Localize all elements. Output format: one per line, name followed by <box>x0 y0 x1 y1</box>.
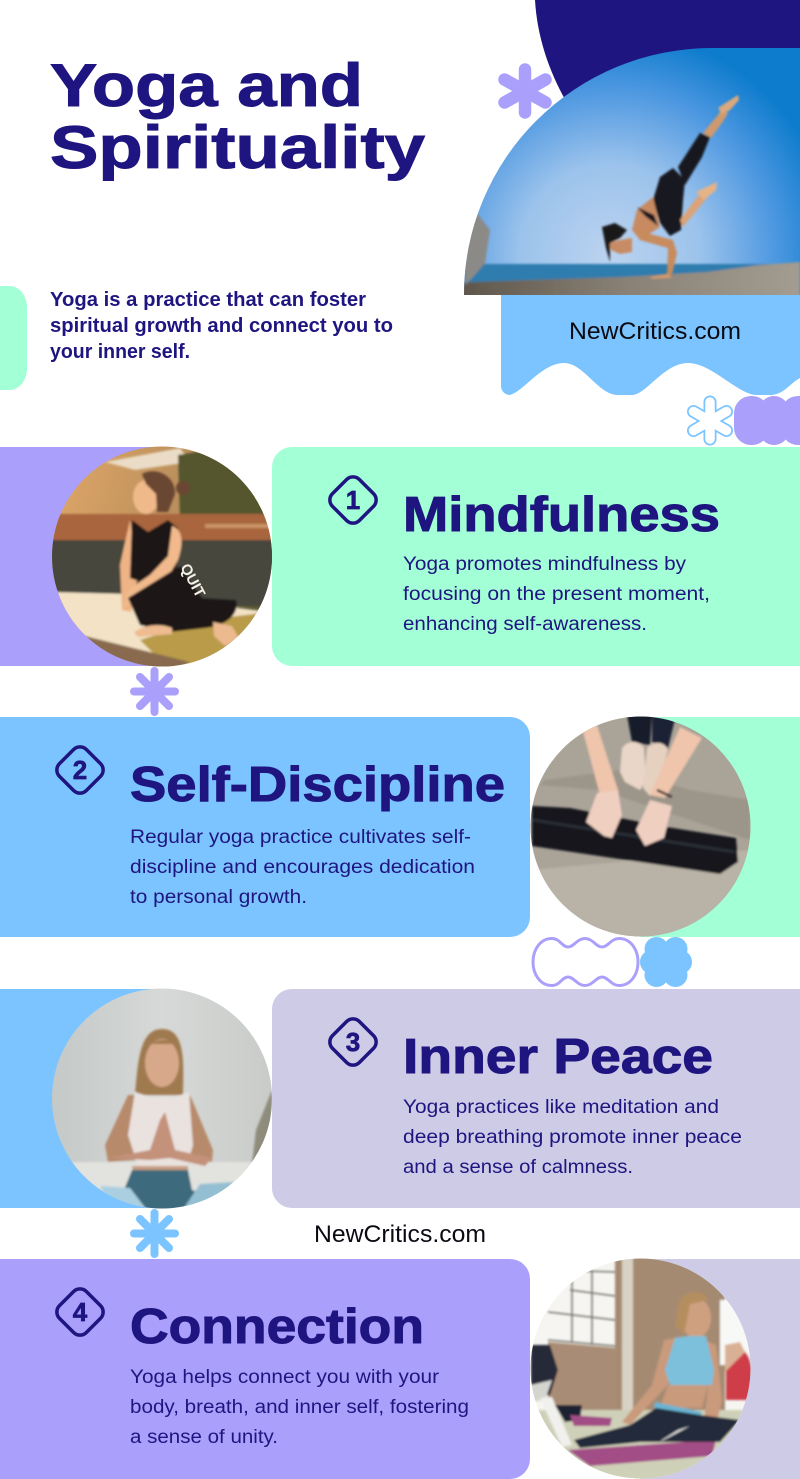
website label: NewCritics.com <box>569 318 741 345</box>
heading: Inner Peace <box>403 1030 713 1084</box>
body text <box>130 1367 469 1448</box>
body text <box>403 1097 742 1178</box>
panel backdrop: lavender <box>640 1259 800 1479</box>
body text: Yoga promotes mindfulness by <box>403 554 687 575</box>
intro text: spiritual growth and connect you to <box>50 315 393 337</box>
purple scalloped blob <box>734 396 800 445</box>
icon: numbered diamond 1 <box>326 473 380 527</box>
heading: Connection <box>130 1300 424 1354</box>
body text: enhancing self-awareness. <box>403 614 647 635</box>
content card: purple <box>0 1259 530 1479</box>
body text: deep breathing promote inner peace <box>403 1127 742 1148</box>
body text: and a sense of calmness. <box>403 1157 633 1178</box>
icon: blue eight-arm asterisk <box>134 1213 175 1254</box>
title: Yoga and <box>50 52 363 119</box>
content card: lavender <box>272 989 800 1208</box>
website label: NewCritics.com <box>314 1221 486 1248</box>
panel: connection <box>0 1257 800 1479</box>
body text: a sense of unity. <box>130 1427 278 1448</box>
panel backdrop: purple <box>0 447 170 666</box>
panel: self-discipline <box>0 715 800 940</box>
hero photo: yoga pose on seaside rock <box>460 45 800 297</box>
body text <box>130 827 475 908</box>
title <box>50 52 426 181</box>
intro accent tab <box>0 286 27 390</box>
body text: focusing on the present moment, <box>403 584 710 605</box>
icon: numbered diamond 2 <box>53 743 107 797</box>
outlined scalloped blob <box>533 938 638 986</box>
icon: numbered diamond 3: 3 <box>346 1027 360 1057</box>
title: Spirituality <box>50 114 426 181</box>
body text: body, breath, and inner self, fostering <box>130 1397 469 1418</box>
icon: purple eight-arm asterisk <box>134 671 175 712</box>
body text: to personal growth. <box>130 887 307 908</box>
icon: blue flower <box>640 937 692 987</box>
panel backdrop: blue <box>0 989 170 1208</box>
body text: Regular yoga practice cultivates self- <box>130 827 471 848</box>
icon: numbered diamond 4: 4 <box>73 1297 88 1327</box>
intro text: your inner self. <box>50 341 190 363</box>
content card: blue <box>0 717 530 937</box>
intro text: Yoga is a practice that can foster <box>50 289 366 311</box>
icon: purple six-arm asterisk <box>504 70 546 112</box>
body text: discipline and encourages dedication <box>130 857 475 878</box>
icon: numbered diamond 1: 1 <box>346 485 360 515</box>
panel backdrop: mint <box>640 717 800 937</box>
panel: inner peace <box>0 987 800 1214</box>
panel: mindfulness <box>0 445 800 672</box>
body text <box>403 554 710 635</box>
woman figure <box>602 95 739 279</box>
legging lettering: QUIT <box>176 561 208 601</box>
icon: numbered diamond 4 <box>53 1285 107 1339</box>
icon: numbered diamond 3 <box>326 1015 380 1069</box>
heading: Mindfulness <box>403 488 720 542</box>
navy arc behind hero photo <box>535 0 800 103</box>
photo: rolling a yoga mat <box>528 715 753 940</box>
content card: mint <box>272 447 800 666</box>
body text: Yoga practices like meditation and <box>403 1097 719 1118</box>
photo: meditation pose <box>50 987 275 1214</box>
photo: seated twist by the river <box>50 445 275 672</box>
intro text <box>50 289 393 363</box>
woman <box>120 520 138 612</box>
icon: outlined flower <box>694 402 726 439</box>
body text: Yoga helps connect you with your <box>130 1367 440 1388</box>
photo: group stretching in a studio <box>528 1257 753 1479</box>
icon: numbered diamond 2: 2 <box>73 755 87 785</box>
wavy blue banner <box>501 295 800 395</box>
heading: Self-Discipline <box>130 758 505 812</box>
